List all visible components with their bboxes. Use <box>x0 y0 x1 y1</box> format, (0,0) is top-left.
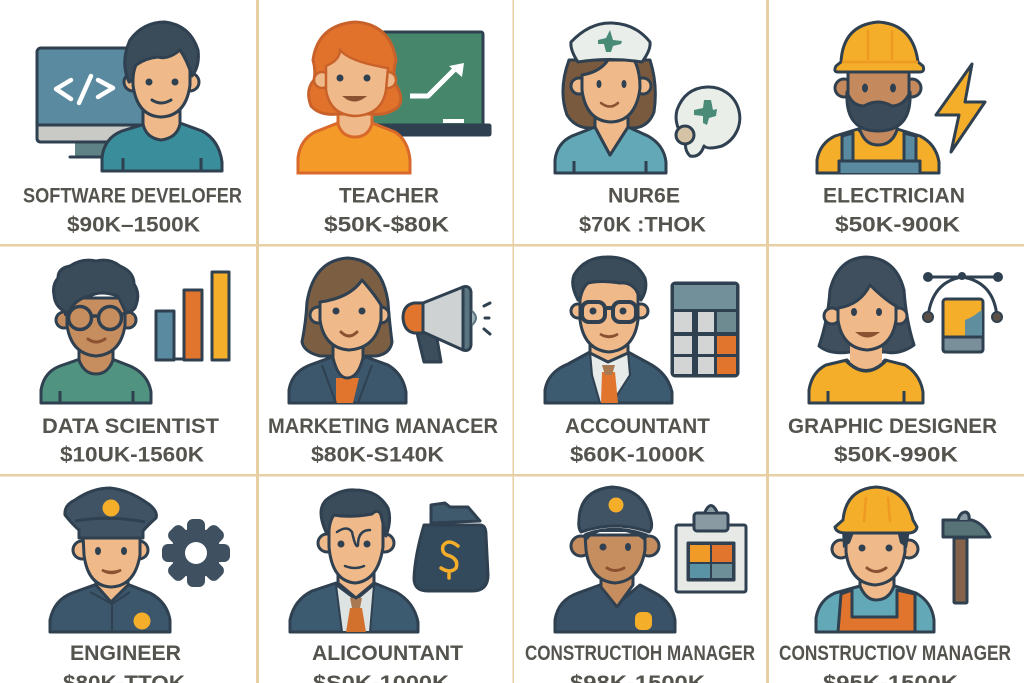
icon: accountant avatar <box>545 257 672 403</box>
salary: $50K-900K <box>835 214 960 236</box>
salary: $10UK-1560K <box>60 444 204 467</box>
icon: stethoscope speech bubble <box>676 87 740 156</box>
heading: CONSTRUCTIOH MANAGER <box>525 642 755 665</box>
heading: NUR6E <box>608 184 680 208</box>
icon: nurse avatar <box>555 23 666 173</box>
panel: electrician <box>817 22 985 236</box>
icon: bezier tool and tablet <box>923 272 1003 352</box>
heading: ELECTRICIAN <box>823 184 965 208</box>
salary: $70K :THOK <box>579 214 706 236</box>
heading: GRAPHIC DESIGNER <box>788 415 997 438</box>
icon: gear <box>162 519 230 587</box>
panel: marketing manager <box>268 258 498 467</box>
panel: graphic designer <box>788 257 1003 467</box>
panel: data scientist <box>41 260 229 467</box>
salary: $90K–1500K <box>67 214 200 236</box>
icon: teacher avatar <box>298 22 410 173</box>
icon: developer avatar <box>102 22 222 171</box>
panel: accountant <box>545 257 738 467</box>
icon: uniformed manager avatar <box>555 487 675 632</box>
panel: software developer <box>23 22 242 236</box>
icon: computer monitor with code <box>37 48 147 157</box>
heading: DATA SCIENTIST <box>42 415 219 438</box>
panel: engineer <box>50 488 230 683</box>
icon: hammer <box>943 512 990 603</box>
icon: calculator <box>672 283 738 376</box>
salary: $50K-990K <box>834 444 958 467</box>
icon: construction worker avatar <box>816 487 934 632</box>
icon: money bag <box>414 503 488 591</box>
salary: $80K-S140K <box>311 444 444 467</box>
icon: clipboard chart <box>676 506 746 592</box>
heading: ENGINEER <box>70 642 181 665</box>
icon: engineer avatar <box>50 488 170 632</box>
icon: businessman avatar <box>290 490 418 632</box>
panel: nurse <box>555 23 740 237</box>
panel: construction manager hard hat <box>779 487 1011 683</box>
icon: chalkboard <box>372 32 490 135</box>
panel: alicountant <box>290 490 488 683</box>
icon: data scientist avatar <box>41 260 151 403</box>
panel: construction manager uniform <box>525 487 755 683</box>
icon: electrician avatar <box>817 22 939 173</box>
heading: MARKETING MANACER <box>268 415 498 438</box>
heading: TEACHER <box>339 184 439 208</box>
icon: megaphone <box>403 287 490 362</box>
icon: lightning bolt <box>936 64 985 152</box>
salary: $60K-1000K <box>570 444 705 467</box>
heading: SOFTWARE DEVELOFER <box>23 184 242 208</box>
heading: ALICOUNTANT <box>312 642 463 665</box>
icon: graphic designer avatar <box>809 257 923 403</box>
icon: marketing manager avatar <box>289 258 406 403</box>
salary: $50K-$80K <box>324 214 449 236</box>
panel: teacher <box>298 22 490 236</box>
heading: ACCOUNTANT <box>565 415 710 438</box>
bar chart <box>156 272 229 360</box>
